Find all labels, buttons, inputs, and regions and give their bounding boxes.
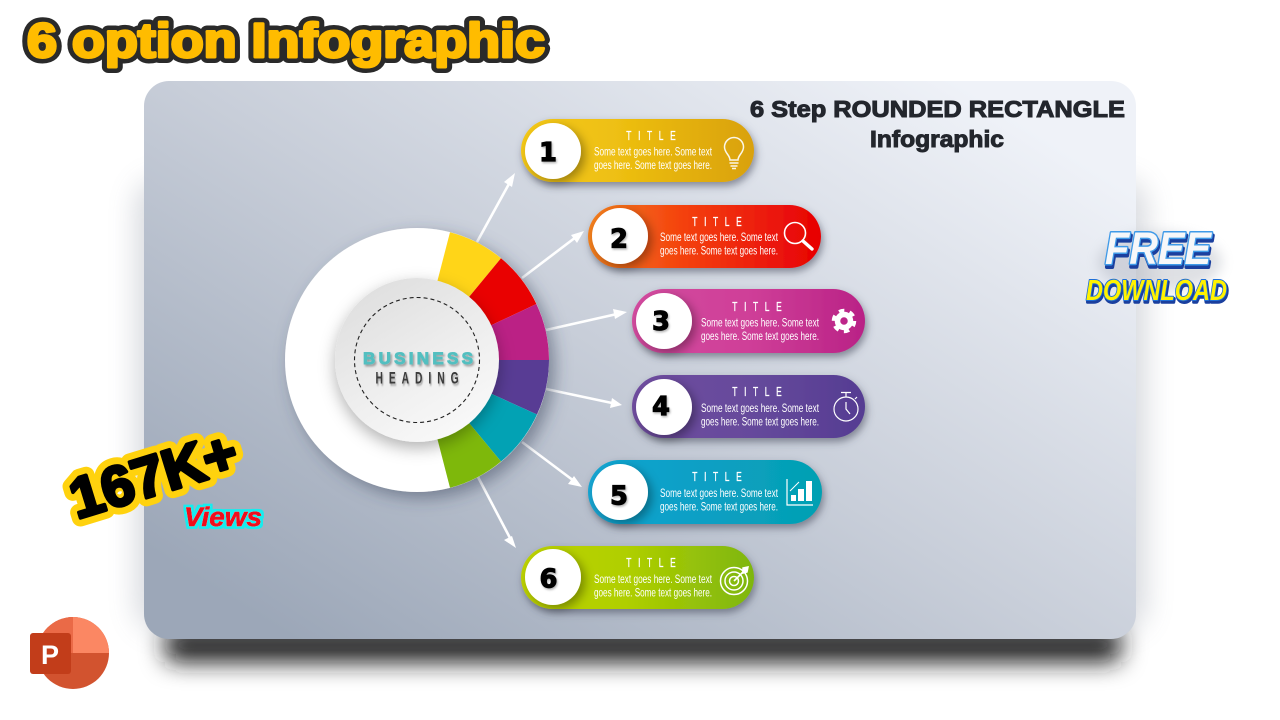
icon: PowerPoint logo: P	[41, 640, 59, 670]
arrow 4	[546, 389, 622, 408]
pill 4: Some text goes here. Some text	[701, 401, 819, 415]
panel shadow	[136, 180, 1146, 662]
heading: Infographic	[870, 126, 1004, 152]
free text: FREE	[1105, 223, 1213, 274]
pill 6: TITLE	[626, 556, 676, 571]
pill 2: Some text goes here. Some text	[660, 230, 778, 244]
pill 1: goes here. Some text goes here.	[594, 158, 712, 172]
dashed ring	[354, 298, 480, 422]
pill 5: 5	[610, 482, 628, 512]
pill 3: TITLE	[732, 300, 782, 315]
pill 4	[632, 375, 865, 438]
centre label: BUSINESS	[363, 349, 473, 368]
download text: DOWNLOAD	[1087, 277, 1228, 309]
icon: PowerPoint logo	[30, 617, 109, 689]
segment teal	[417, 360, 537, 462]
segment yellow	[417, 232, 501, 360]
pill 5	[588, 460, 822, 524]
arrow 2	[522, 231, 584, 278]
icon: magnifier	[784, 222, 812, 249]
pill 5: Some text goes here. Some text	[660, 486, 778, 500]
title: 6 option Infographic	[27, 15, 545, 68]
centre label	[363, 349, 473, 387]
free download badge	[1086, 223, 1228, 309]
segment magenta	[417, 304, 549, 360]
pill 2: 2	[610, 224, 628, 254]
pill 4: TITLE	[732, 385, 782, 400]
pill 3: goes here. Some text goes here.	[701, 329, 819, 343]
arrow 6	[478, 477, 516, 548]
arrows	[477, 173, 627, 548]
pill 5: goes here. Some text goes here.	[660, 500, 778, 514]
arrow 1	[477, 173, 515, 242]
main panel	[144, 81, 1136, 639]
centre label: HEADING	[375, 369, 459, 387]
pill 6	[521, 546, 754, 609]
free text: FREE	[1106, 226, 1214, 277]
pill 2: goes here. Some text goes here.	[660, 244, 778, 258]
title: 6 option Infographic	[27, 15, 545, 68]
heading	[750, 96, 1125, 152]
icon: target	[720, 567, 748, 594]
white ring	[285, 228, 549, 492]
167K+ text: 167K+	[62, 420, 245, 531]
segment red	[417, 258, 536, 360]
heading: 6 Step ROUNDED RECTANGLE	[750, 96, 1125, 122]
pill 6: 6	[540, 564, 557, 594]
pill 2: TITLE	[692, 215, 742, 230]
views badge	[62, 420, 262, 532]
pill 1: TITLE	[626, 129, 676, 144]
167K+ text: 167K+	[62, 420, 245, 531]
free text: FREE	[1105, 223, 1213, 274]
pill 6: goes here. Some text goes here.	[594, 586, 712, 600]
pill 1	[521, 119, 754, 182]
pill 5: TITLE	[692, 470, 742, 485]
pill 3: 3	[652, 307, 670, 337]
soft shadow	[1098, 232, 1222, 292]
pill 1: 1	[539, 138, 557, 168]
pill 1: Some text goes here. Some text	[594, 144, 712, 158]
views text: Views	[184, 502, 262, 532]
pill 3: Some text goes here. Some text	[701, 316, 819, 330]
pill 6: Some text goes here. Some text	[594, 572, 712, 586]
pill 3	[632, 289, 865, 353]
icon: gear	[834, 310, 854, 332]
icon: light bulb	[724, 138, 744, 168]
pill 4: goes here. Some text goes here.	[701, 414, 819, 428]
arrow 3	[546, 309, 627, 330]
icon: bar chart	[787, 479, 813, 505]
segment green	[417, 360, 501, 488]
pill 4: 4	[652, 392, 670, 422]
donut chart	[285, 228, 549, 492]
download text: DOWNLOAD	[1086, 275, 1227, 307]
icon: stopwatch	[834, 392, 858, 421]
segment purple	[417, 360, 549, 414]
arrow 5	[522, 442, 582, 487]
centre disc	[335, 278, 499, 442]
pill 2	[588, 205, 821, 268]
download text: DOWNLOAD	[1086, 275, 1227, 307]
